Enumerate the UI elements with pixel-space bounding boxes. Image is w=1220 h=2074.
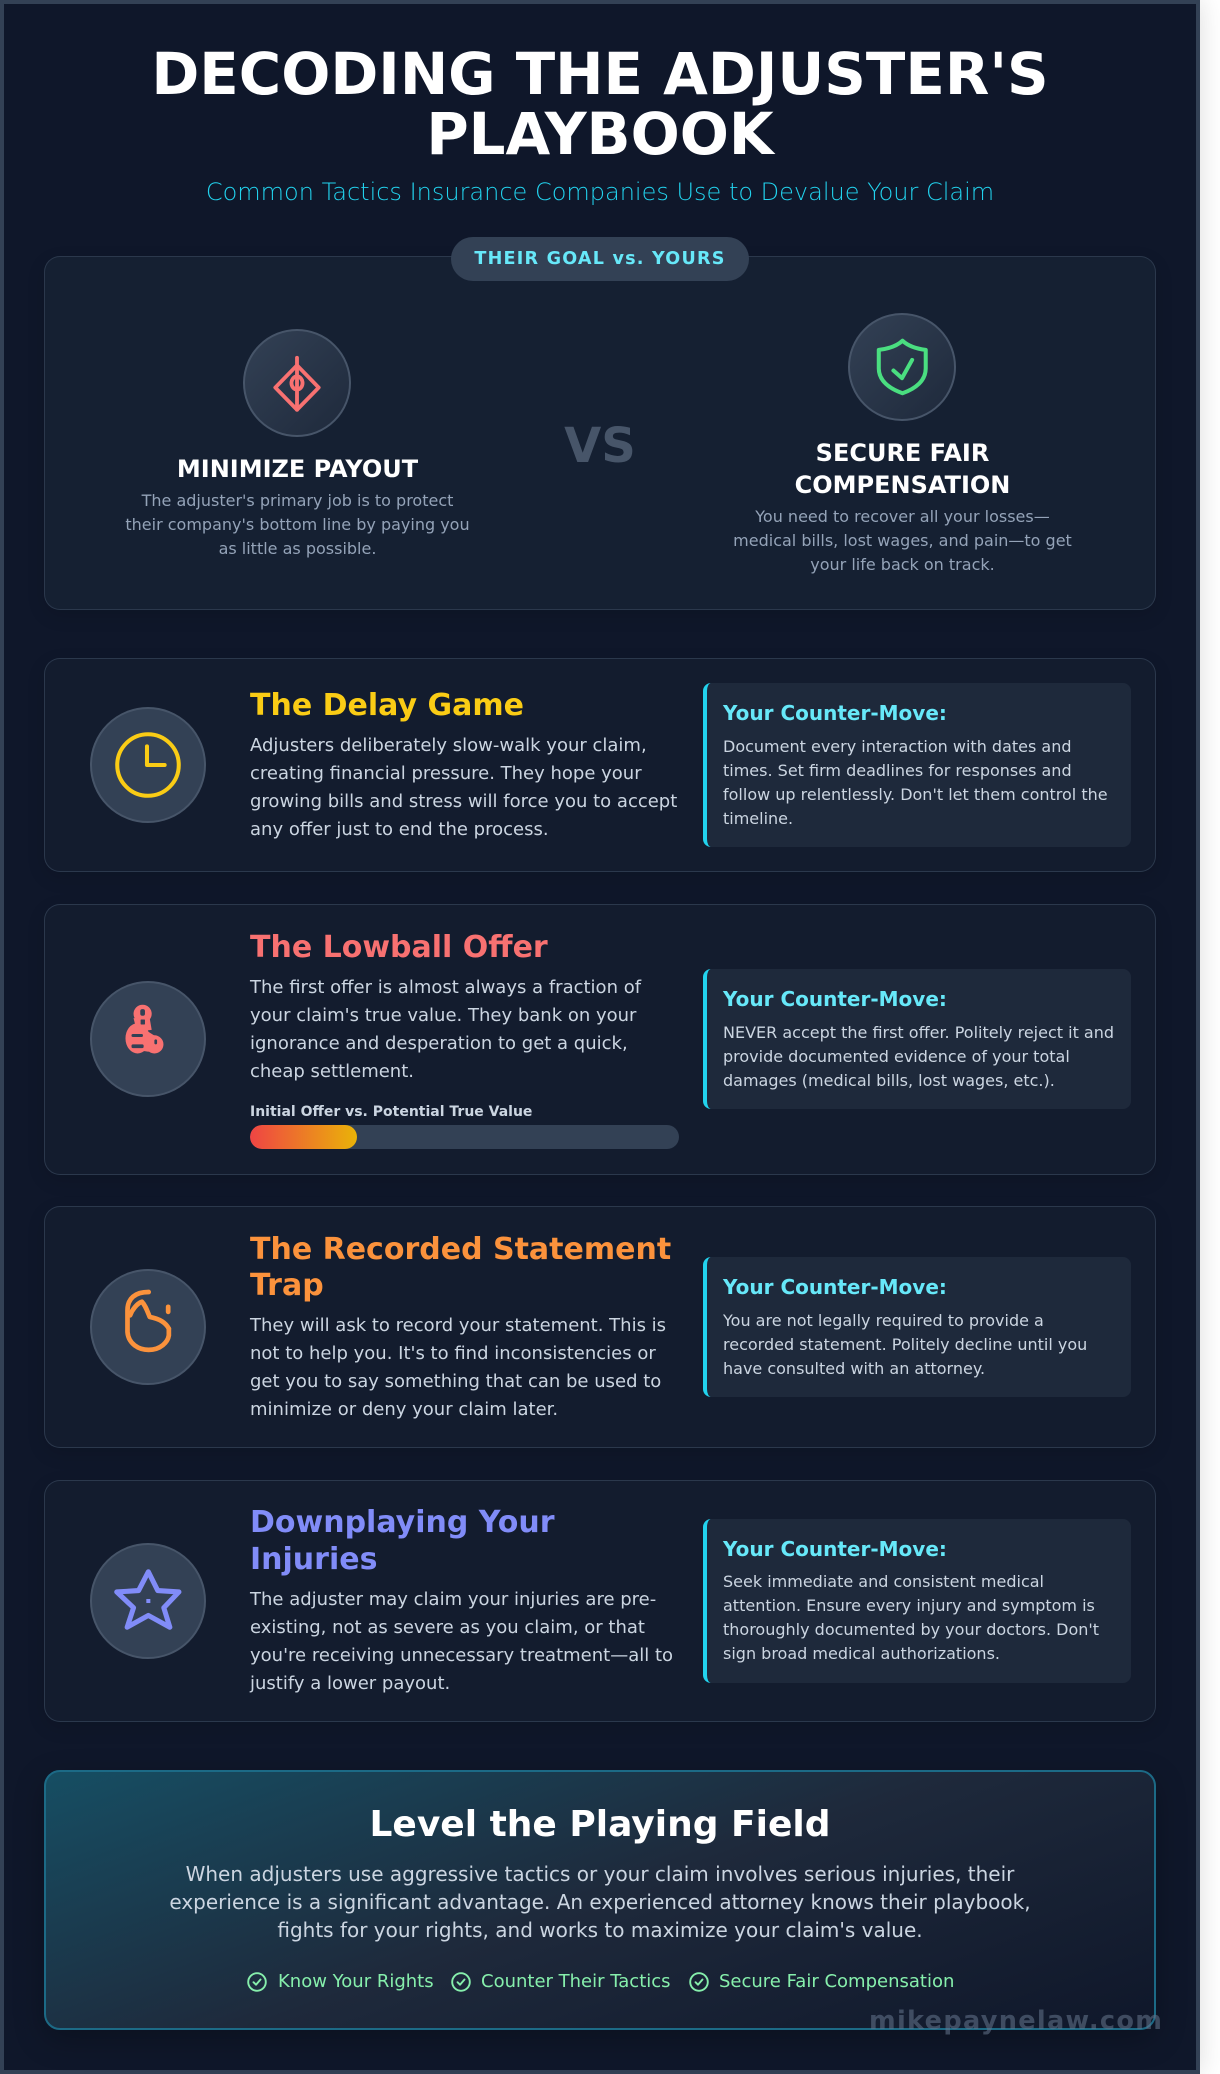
callout text: damages (medical bills, lost wages, etc.). (723, 1070, 1055, 1090)
heading: downplaying your injuries: Injuries (250, 1542, 377, 1576)
text: lowball description: The first offer is almost always a fraction of (250, 976, 641, 998)
label: Secure Fair Compensation (719, 1971, 954, 1992)
text: downplaying description (250, 1589, 673, 1694)
title: PLAYBOOK (426, 100, 774, 168)
column: minimize payout (125, 329, 470, 558)
text: downplaying description: justify a lower payout. (250, 1673, 450, 1694)
heading: secure fair compensation (795, 439, 1010, 499)
column: secure fair compensation (733, 313, 1072, 574)
icon: star (90, 1542, 206, 1658)
callout heading: Your Counter-Move: (723, 1275, 947, 1299)
text: your goal: You need to recover all your losses— (755, 507, 1050, 526)
title: DECODING THE ADJUSTER'S (151, 40, 1049, 108)
panel: their goal vs yours (44, 256, 1156, 610)
callout text (723, 1310, 1087, 1378)
bar track and fill (250, 1125, 679, 1149)
text: delay description: Adjusters deliberately slow-walk your claim, (250, 735, 647, 756)
icon: microphone swirl (90, 1268, 206, 1384)
icon: shield check (848, 312, 956, 420)
text: your goal: your life back on track. (810, 555, 995, 574)
text: downplaying description: you're receiving unnecessary treatment—all to (250, 1645, 673, 1666)
pill: know your rights (247, 1971, 434, 1992)
subtitle: Common Tactics Insurance Companies Use to Devalue Your Claim (206, 178, 994, 206)
chart: initial offer vs true value (250, 1104, 679, 1149)
heading: the recorded statement trap: Trap (250, 1268, 324, 1303)
text: delay description: any offer just to end the process. (250, 819, 549, 840)
text: delay description: creating financial pressure. They hope your (250, 763, 642, 784)
callout text: attention. Ensure every injury and symptom is (723, 1596, 1095, 1615)
icon: clock (90, 707, 206, 823)
icon: money bag (90, 981, 206, 1097)
heading: minimize payout: MINIMIZE PAYOUT (177, 455, 418, 483)
panel: the lowball offer (44, 904, 1156, 1175)
panel: downplaying your injuries (44, 1480, 1156, 1722)
callout text: You are not legally required to provide a (723, 1310, 1044, 1330)
heading: level the playing field: Level the Playing Field (369, 1804, 830, 1845)
panel: level the playing field (44, 1770, 1156, 2030)
callout heading: Your Counter-Move: (723, 987, 947, 1011)
text: your goal: medical bills, lost wages, and pain—to get (733, 531, 1072, 550)
vs label: VS (564, 418, 636, 474)
callout text: provide documented evidence of your total (723, 1046, 1070, 1066)
heading: the recorded statement trap (250, 1232, 671, 1303)
panel: the delay game (44, 658, 1156, 872)
heading: secure fair compensation: COMPENSATION (795, 471, 1010, 499)
icon: target diamond (242, 328, 350, 436)
callout text: NEVER accept the first offer. Politely reject it and (723, 1022, 1114, 1042)
callout text: times. Set firm deadlines for responses and (723, 760, 1072, 780)
heading: downplaying your injuries: Downplaying Your (250, 1505, 555, 1540)
callout text: Document every interaction with dates and (723, 736, 1072, 756)
text: downplaying description: existing, not as severe as you claim, or that (250, 1617, 645, 1638)
text: lowball description: ignorance and desperation to get a quick, (250, 1033, 628, 1054)
text: lowball description (250, 976, 642, 1082)
panel: the recorded statement trap (44, 1206, 1156, 1448)
callout text: recorded statement. Politely decline until you (723, 1334, 1087, 1354)
heading: the recorded statement trap: The Recorded Statement (250, 1232, 671, 1266)
pill: secure fair compensation (689, 1971, 954, 1992)
callout text: Seek immediate and consistent medical (723, 1572, 1044, 1591)
text: lowball description: your claim's true value. They bank on your (250, 1005, 636, 1026)
text: call to action: experience is a significant advantage. An experienced attorney knows their playbook, (169, 1890, 1031, 1914)
text: delay description (250, 735, 677, 840)
text: recorded statement description: minimize or deny your claim later. (250, 1399, 558, 1420)
callout text (723, 736, 1108, 828)
text: recorded statement description: not to help you. It's to find inconsistencies or (250, 1343, 656, 1364)
text: recorded statement description: get you to say something that can be used to (250, 1371, 661, 1392)
callout heading: Your Counter-Move: (723, 701, 947, 725)
callout text: timeline. (723, 808, 793, 828)
text: adjuster goal (125, 491, 470, 558)
text: recorded statement description: They will ask to record your statement. This is (250, 1315, 666, 1336)
label: Counter Their Tactics (481, 1971, 671, 1992)
pill: counter their tactics (451, 1971, 671, 1992)
callout text (723, 1572, 1099, 1663)
callout text: sign broad medical authorizations. (723, 1644, 1000, 1663)
text: call to action: When adjusters use aggressive tactics or your claim involves serious injuries, their (186, 1862, 1014, 1886)
heading: the lowball offer: The Lowball Offer (250, 930, 548, 964)
heading: downplaying your injuries (250, 1505, 555, 1576)
text: recorded statement description (250, 1315, 666, 1420)
watermark: mikepaynelaw.com (869, 2006, 1163, 2036)
text: your goal (733, 507, 1072, 574)
callout heading: Your Counter-Move: (723, 1536, 947, 1560)
text: adjuster goal: The adjuster's primary job is to protect (142, 491, 453, 510)
text: delay description: growing bills and stress will force you to accept (250, 791, 677, 812)
text: call to action: fights for your rights, and works to maximize your claim's value. (277, 1918, 923, 1942)
heading: the delay game: The Delay Game (250, 688, 524, 722)
callout: counter-move (703, 969, 1131, 1109)
icon: check circle (689, 1972, 709, 1992)
callout: counter-move (703, 1257, 1131, 1397)
text: adjuster goal: their company's bottom line by paying you (125, 515, 470, 534)
heading: secure fair compensation: SECURE FAIR (816, 439, 989, 467)
title (151, 40, 1049, 168)
badge: their goal vs yours: THEIR GOAL vs. YOURS (474, 249, 726, 269)
callout text: have consulted with an attorney. (723, 1358, 985, 1378)
callout text: follow up relentlessly. Don't let them control the (723, 784, 1108, 804)
callout: counter-move (703, 683, 1131, 847)
callout text (723, 1022, 1114, 1090)
text: downplaying description: The adjuster may claim your injuries are pre- (250, 1589, 656, 1610)
icon: check circle (247, 1972, 267, 1992)
callout text: thoroughly documented by your doctors. Don't (723, 1620, 1099, 1639)
badge: their goal vs yours (451, 237, 749, 281)
callout: counter-move (703, 1518, 1131, 1682)
icon: check circle (451, 1972, 471, 1992)
text: call to action (169, 1862, 1031, 1942)
text: lowball description: cheap settlement. (250, 1061, 414, 1082)
text: adjuster goal: as little as possible. (219, 539, 376, 558)
chart label: Initial Offer vs. Potential True Value (250, 1104, 532, 1120)
label: Know Your Rights (278, 1971, 434, 1992)
